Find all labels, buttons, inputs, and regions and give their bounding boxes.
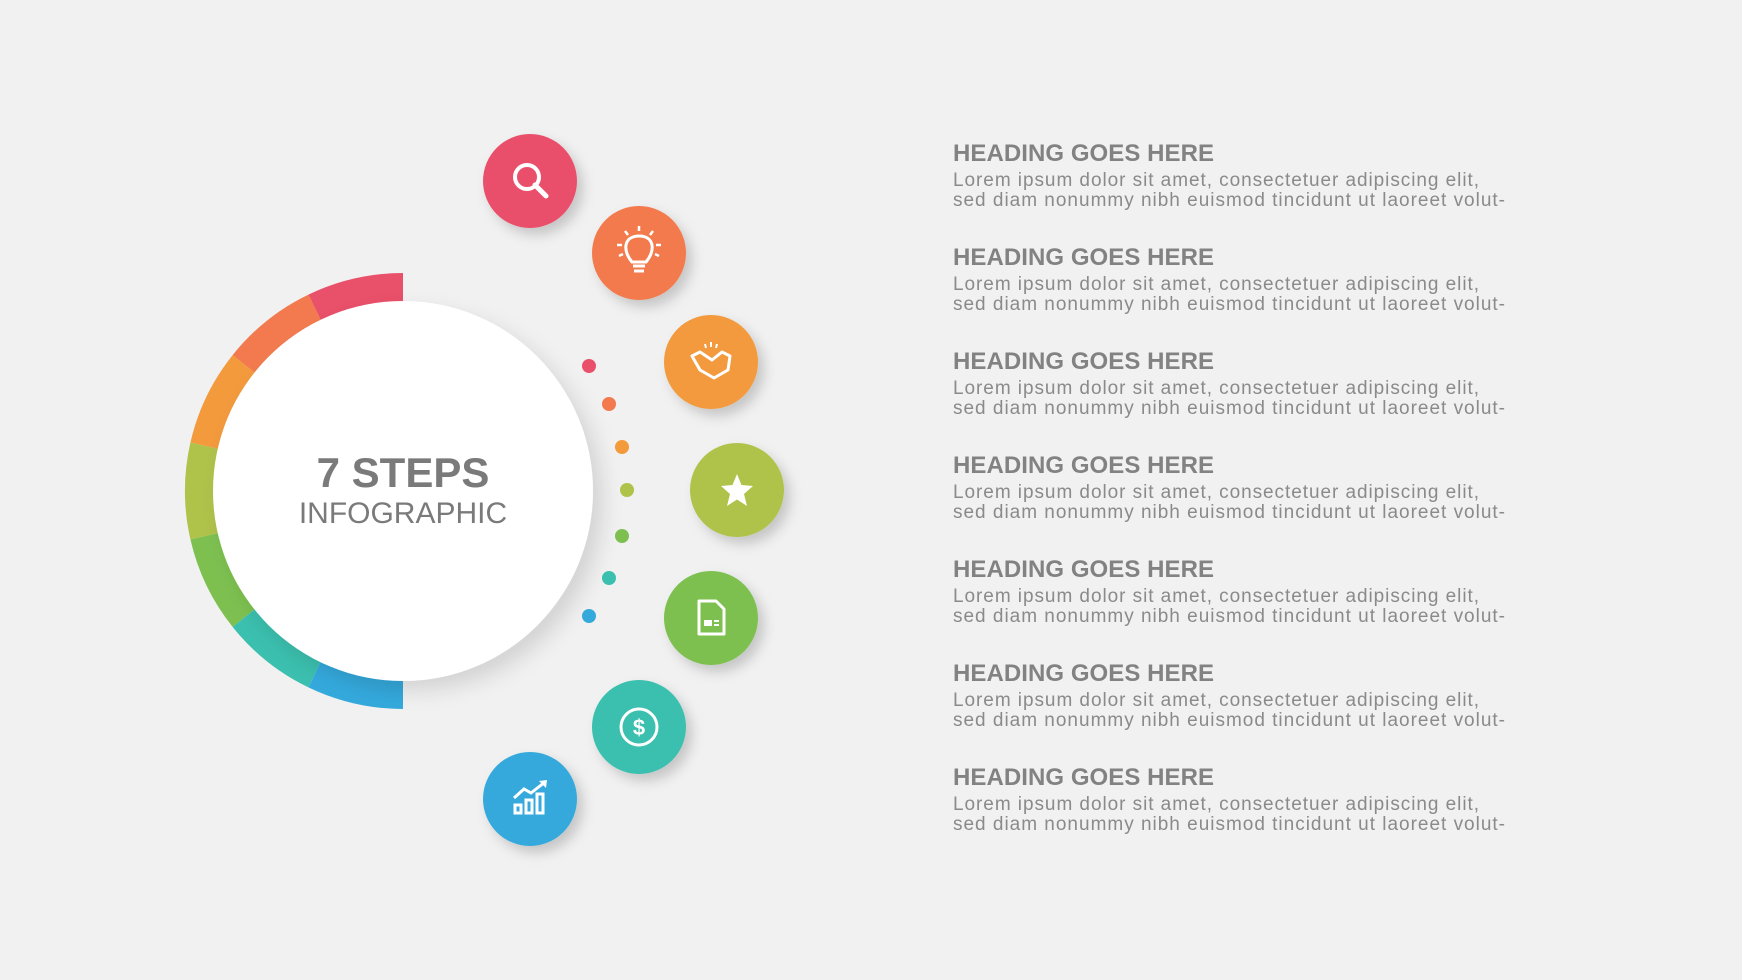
ring: colored 7 segments — [202, 290, 403, 692]
icon: document — [664, 571, 758, 665]
step 7 text: Lorem ipsum dolor sit amet, consectetuer adipiscing elit, — [953, 794, 1479, 815]
icon: dollar — [592, 680, 686, 774]
step 3 text: sed diam nonummy nibh euismod tincidunt ut laoreet volut- — [953, 398, 1505, 419]
step 2 text: HEADING GOES HERE — [953, 244, 1214, 271]
center circle with title: 7 STEPS — [317, 449, 489, 496]
connector dots — [582, 359, 634, 623]
step 5 text: HEADING GOES HERE — [953, 556, 1214, 583]
step 6 text: HEADING GOES HERE — [953, 660, 1214, 687]
step 7 text: sed diam nonummy nibh euismod tincidunt ut laoreet volut- — [953, 814, 1505, 835]
icon: growth chart — [483, 752, 577, 846]
step 2 text: Lorem ipsum dolor sit amet, consectetuer adipiscing elit, — [953, 274, 1479, 295]
step 7 text: HEADING GOES HERE — [953, 764, 1214, 791]
center circle with title: INFOGRAPHIC — [299, 497, 507, 530]
center circle with title — [213, 301, 593, 681]
step 4 text: Lorem ipsum dolor sit amet, consectetuer adipiscing elit, — [953, 482, 1479, 503]
step 3 text — [953, 348, 1505, 419]
step 1 text — [953, 140, 1505, 211]
step 7 text — [953, 764, 1505, 835]
step 3 text: HEADING GOES HERE — [953, 348, 1214, 375]
step 5 text: sed diam nonummy nibh euismod tincidunt ut laoreet volut- — [953, 606, 1505, 627]
step 4 text: HEADING GOES HERE — [953, 452, 1214, 479]
step 2 text: sed diam nonummy nibh euismod tincidunt ut laoreet volut- — [953, 294, 1505, 315]
icon: dollar: $ — [633, 715, 645, 740]
step 6 text: sed diam nonummy nibh euismod tincidunt ut laoreet volut- — [953, 710, 1505, 731]
icon: light bulb — [592, 206, 686, 300]
step 1 text: Lorem ipsum dolor sit amet, consectetuer adipiscing elit, — [953, 170, 1479, 191]
step 4 text: sed diam nonummy nibh euismod tincidunt ut laoreet volut- — [953, 502, 1505, 523]
step 5 text — [953, 556, 1505, 627]
step 1 text: HEADING GOES HERE — [953, 140, 1214, 167]
step 6 text: Lorem ipsum dolor sit amet, consectetuer adipiscing elit, — [953, 690, 1479, 711]
step 3 text: Lorem ipsum dolor sit amet, consectetuer adipiscing elit, — [953, 378, 1479, 399]
step 5 text: Lorem ipsum dolor sit amet, consectetuer adipiscing elit, — [953, 586, 1479, 607]
step 4 text — [953, 452, 1505, 523]
icon: star — [690, 443, 784, 537]
step 2 text — [953, 244, 1505, 315]
step 1 text: sed diam nonummy nibh euismod tincidunt ut laoreet volut- — [953, 190, 1505, 211]
text blocks — [953, 140, 1505, 835]
icon: search — [483, 134, 577, 228]
icon: handshake — [664, 315, 758, 409]
step 6 text — [953, 660, 1505, 731]
